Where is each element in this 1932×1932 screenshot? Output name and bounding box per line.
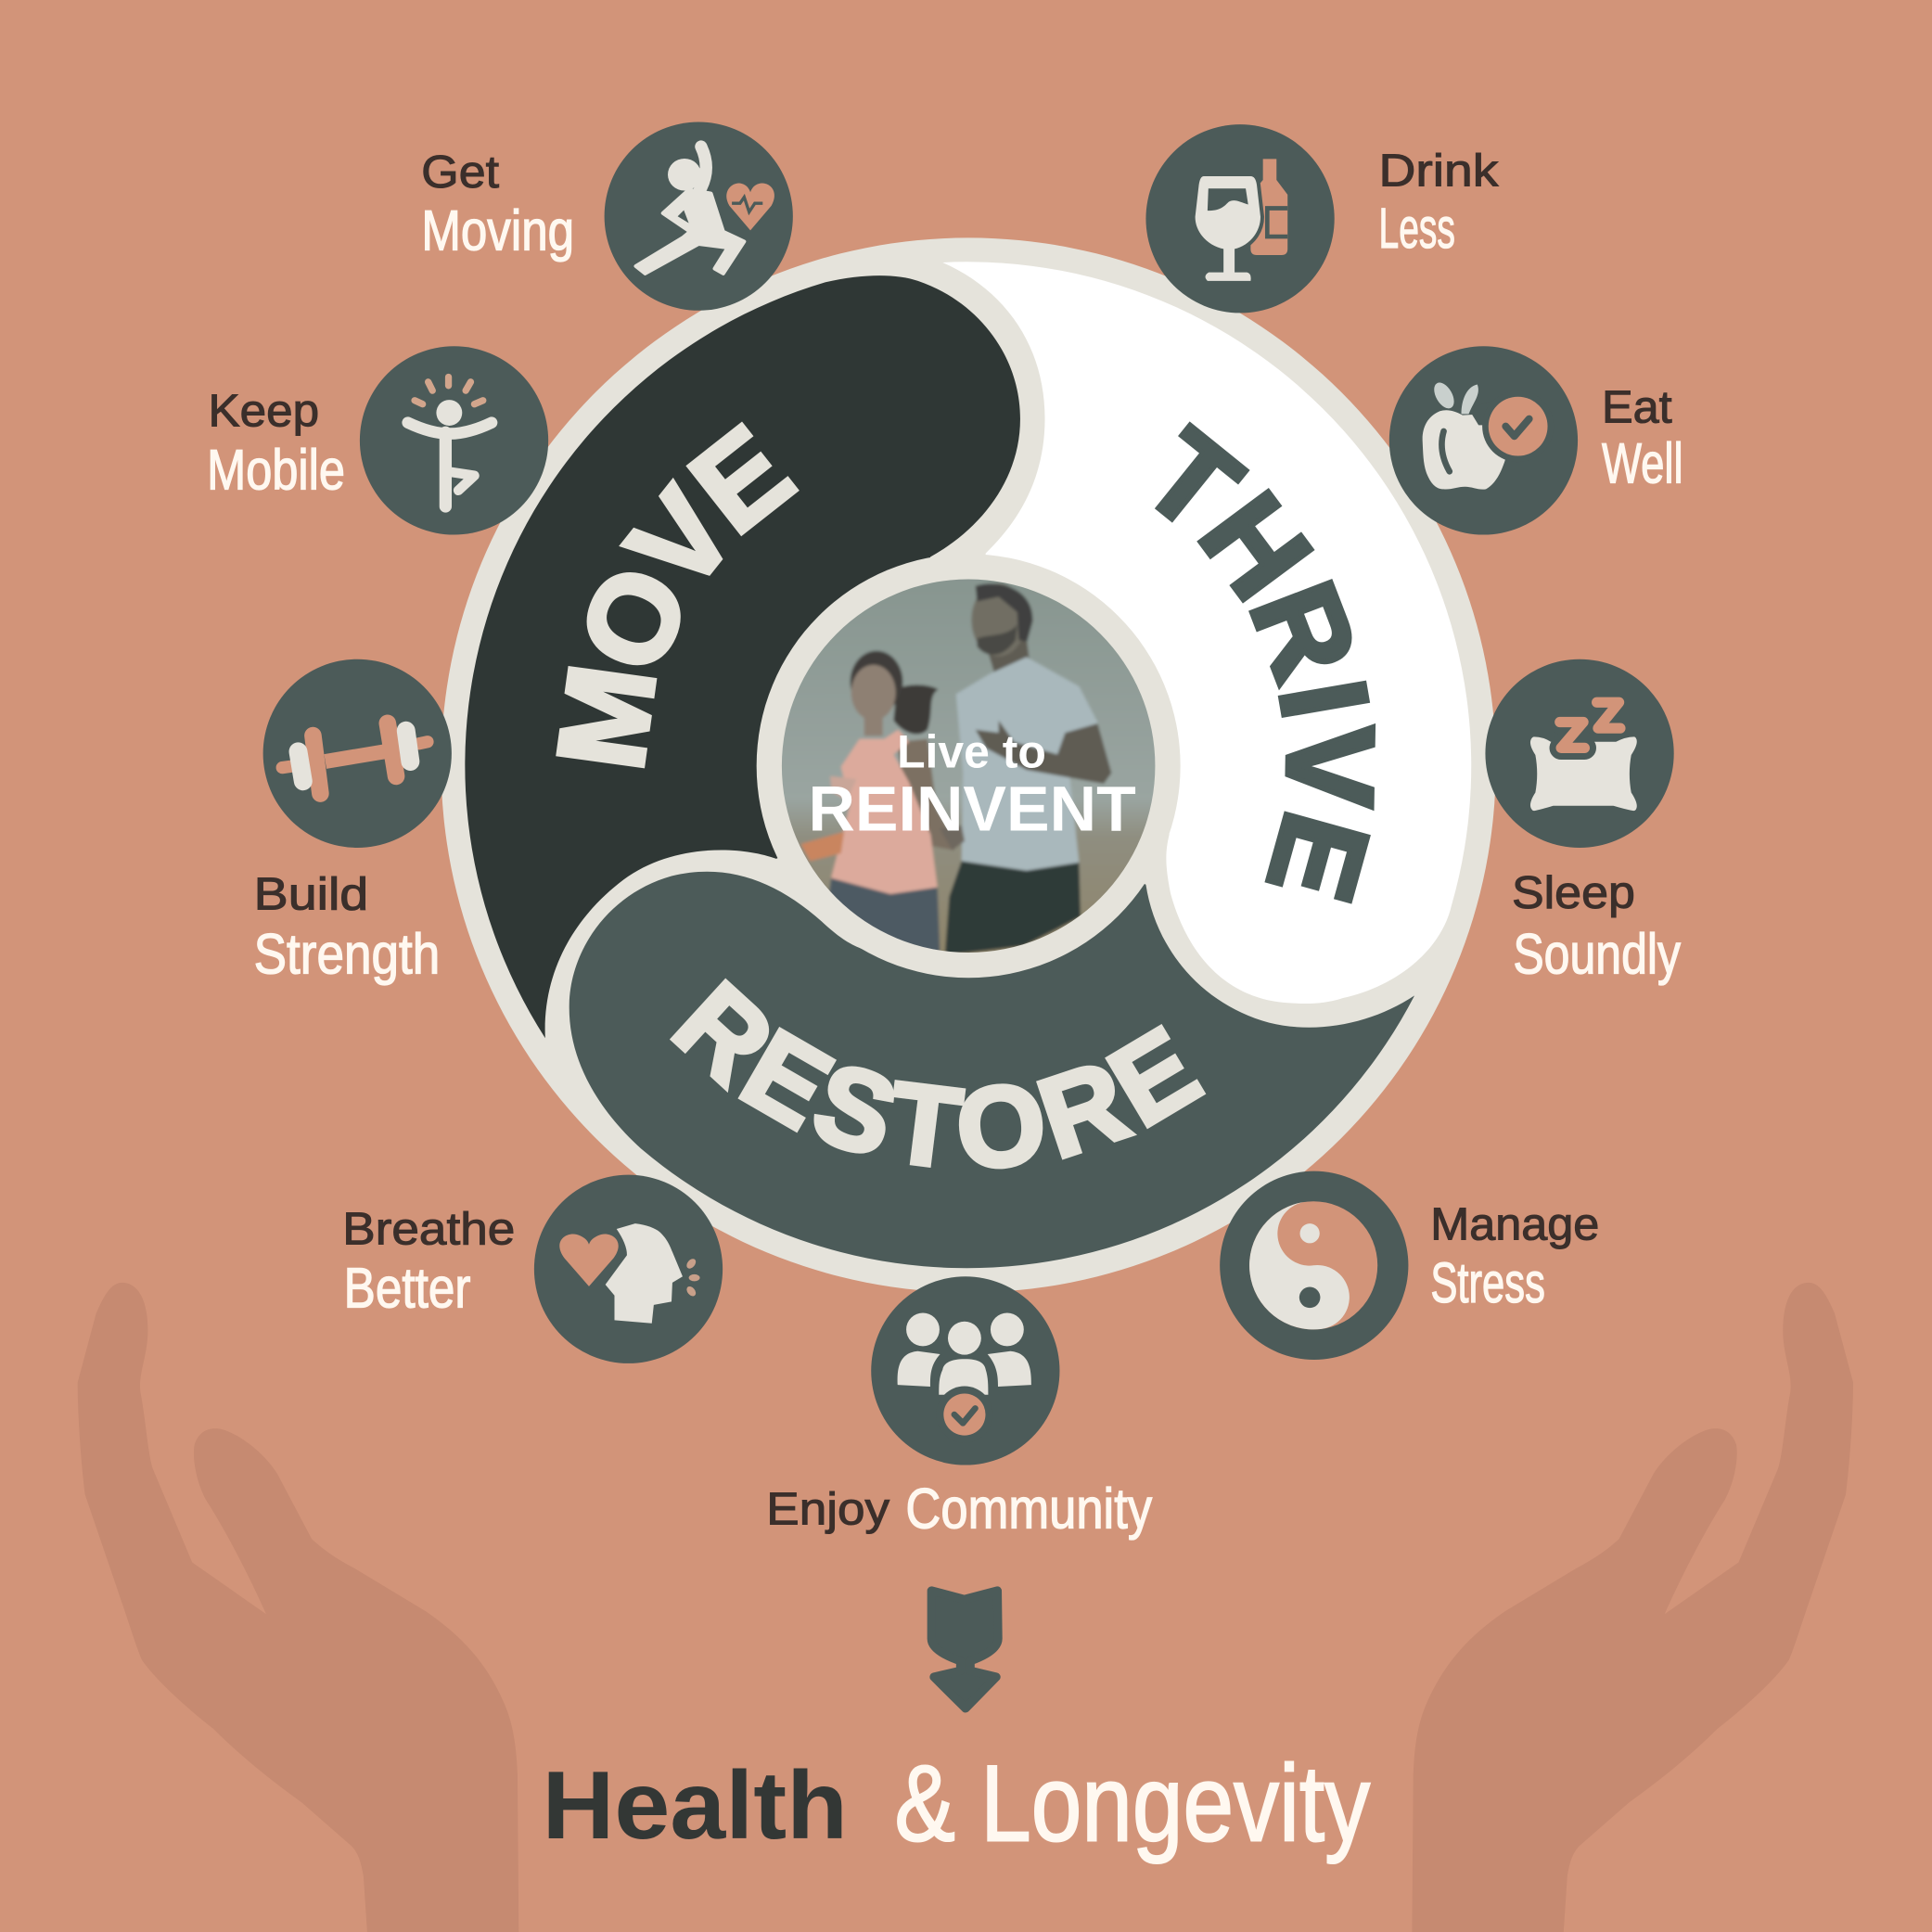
man's arm bbox=[976, 721, 1111, 784]
heading: RESTORE: RESTORE bbox=[670, 978, 1206, 1169]
label: Eat Well: Well bbox=[1602, 432, 1683, 495]
title: Health & Longevity: Health bbox=[543, 1751, 848, 1859]
panel: RESTORE segment bbox=[569, 765, 1414, 1268]
icon: apple with check bbox=[1389, 346, 1578, 535]
label: Drink Less bbox=[1379, 147, 1499, 260]
item: Get Moving bbox=[421, 122, 793, 311]
label: Breathe Better bbox=[342, 1205, 515, 1319]
left hand bbox=[78, 1283, 518, 1932]
icon: yin yang bbox=[1220, 1171, 1408, 1360]
label: Build Strength: Strength bbox=[254, 922, 440, 985]
label: Get Moving: Get bbox=[421, 147, 499, 198]
label: Manage Stress bbox=[1430, 1199, 1599, 1314]
label: Manage Stress: Stress bbox=[1430, 1251, 1545, 1314]
label: Build Strength: Build bbox=[254, 869, 368, 919]
woman's head bbox=[851, 651, 902, 712]
woman's ponytail bbox=[893, 685, 939, 735]
icon: dumbbell bbox=[263, 659, 452, 848]
icon: head with heart bbox=[534, 1175, 723, 1363]
icon: community group bbox=[871, 1276, 1059, 1465]
item: Keep Mobile bbox=[207, 346, 548, 535]
label: Manage Stress: Manage bbox=[1430, 1199, 1599, 1249]
central swirl diagram bbox=[441, 237, 1495, 1291]
label: Breathe Better: Breathe bbox=[342, 1205, 515, 1255]
photo: couple jogging bbox=[773, 572, 1166, 962]
label: Sleep Soundly bbox=[1512, 868, 1681, 985]
outer cream disc bbox=[441, 237, 1496, 1293]
label: Sleep Soundly: Sleep bbox=[1512, 868, 1635, 918]
label: Eat Well bbox=[1602, 383, 1683, 495]
center caption bbox=[808, 725, 1136, 844]
item: Manage Stress bbox=[1220, 1171, 1599, 1360]
label: Get Moving bbox=[421, 147, 574, 262]
man's neck bbox=[988, 638, 1030, 672]
heading: THRIVE: THRIVE bbox=[1155, 421, 1376, 904]
title: Health & Longevity: & Longevity bbox=[894, 1743, 1371, 1864]
item: Eat Well bbox=[1389, 346, 1683, 535]
label: Sleep Soundly: Soundly bbox=[1513, 922, 1681, 985]
heading: MOVE: MOVE bbox=[556, 421, 800, 768]
icon: wine glass and bottle bbox=[1145, 124, 1335, 313]
label: Enjoy Community bbox=[766, 1477, 1152, 1540]
panel: MOVE segment bbox=[465, 275, 1020, 1038]
arrow bbox=[931, 1591, 998, 1708]
item: Sleep Soundly bbox=[1485, 659, 1681, 985]
label: Drink Less: Less bbox=[1379, 197, 1455, 260]
panel: THRIVE segment bbox=[942, 262, 1471, 1004]
item: Breathe Better bbox=[342, 1175, 723, 1363]
label: Keep Mobile bbox=[207, 387, 345, 501]
label: Build Strength bbox=[254, 869, 440, 985]
label: Keep Mobile: Keep bbox=[209, 387, 319, 437]
label: Enjoy Community: Enjoy bbox=[766, 1484, 890, 1534]
title: Health & Longevity bbox=[543, 1743, 1371, 1864]
label: Keep Mobile: Mobile bbox=[207, 438, 345, 501]
label: Enjoy Community: Community bbox=[905, 1477, 1152, 1540]
label: Get Moving: Moving bbox=[421, 199, 574, 262]
woman's arm bbox=[897, 738, 952, 850]
right hand bbox=[1412, 1283, 1853, 1932]
label: Drink Less: Drink bbox=[1379, 147, 1499, 197]
man's trousers bbox=[945, 861, 1081, 955]
item: Enjoy Community bbox=[766, 1276, 1152, 1540]
label: Eat Well: Eat bbox=[1602, 383, 1672, 433]
label: Breathe Better: Better bbox=[344, 1256, 470, 1319]
item: Drink Less bbox=[1145, 124, 1499, 313]
man's shirt bbox=[956, 657, 1098, 871]
woman's leggings bbox=[827, 878, 940, 953]
icon: exercising person with heart bbox=[605, 122, 793, 311]
man's head bbox=[971, 583, 1026, 657]
caption: REINVENT: REINVENT bbox=[808, 772, 1136, 844]
item: Build Strength bbox=[254, 659, 452, 985]
woman's top bbox=[831, 730, 938, 894]
icon: balancing person bbox=[360, 346, 548, 535]
caption: Live to: Live to bbox=[897, 725, 1046, 778]
cream ring around photo bbox=[757, 554, 1181, 978]
icon: pillow with zzz bbox=[1485, 659, 1674, 848]
